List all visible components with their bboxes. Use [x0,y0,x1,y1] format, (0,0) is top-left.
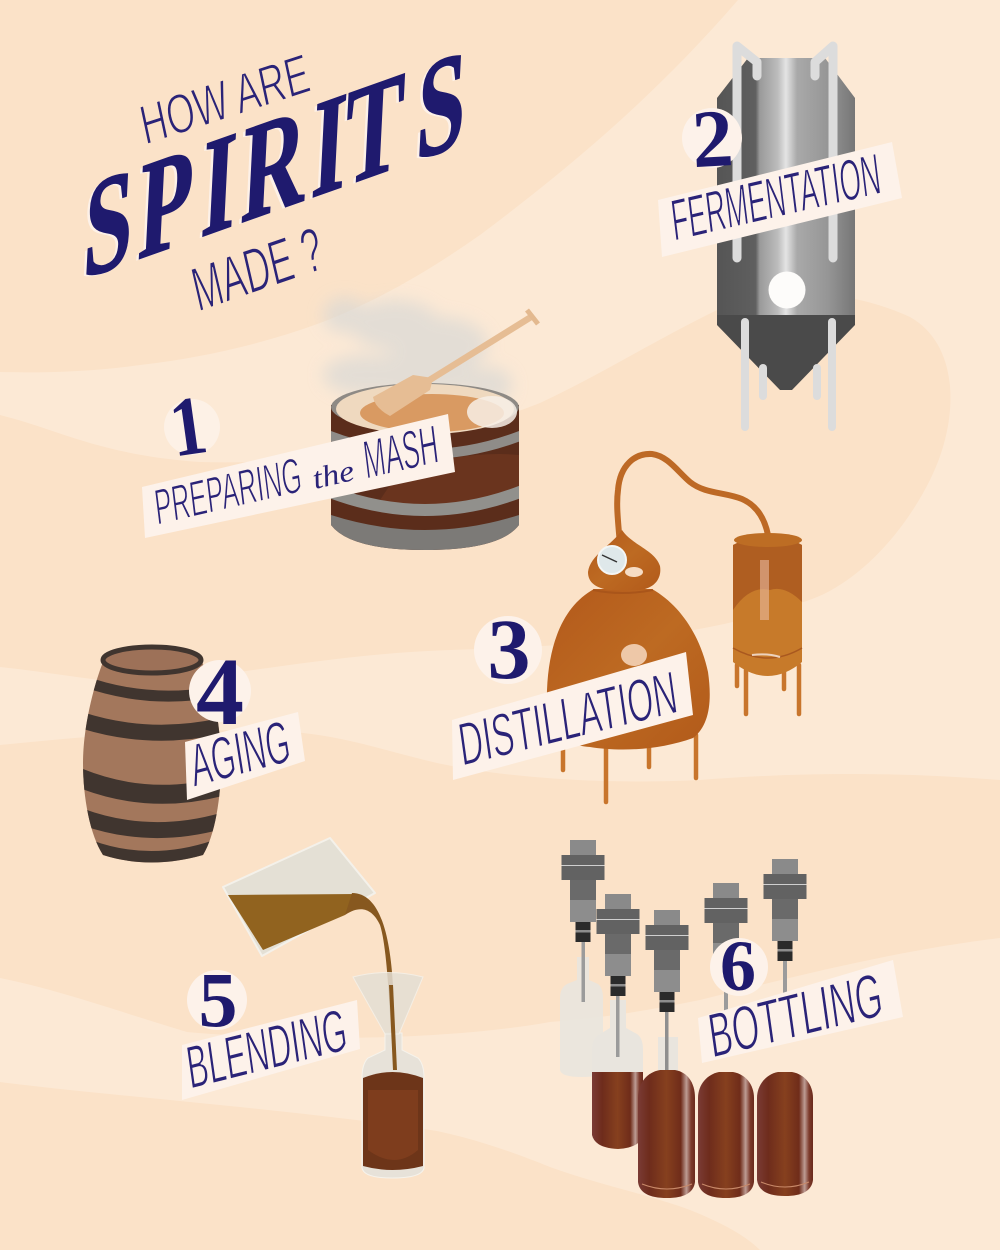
step 1: label preparing the mash: the [309,454,357,496]
plunger a [562,840,604,1002]
legs [745,322,832,427]
bottle [362,1033,424,1178]
swan neck pipe [617,454,768,545]
title line: made: MADE ? [186,214,329,326]
step 5: label blending: BLENDING [182,996,351,1102]
steam cloud [323,297,512,403]
pot body [331,405,519,550]
beaker glass [223,838,375,956]
step 5: number: 5 [198,956,238,1043]
step 4: wooden barrel [83,644,220,862]
step 1: label preparing the mash: PREPARING [152,446,304,536]
still legs [563,665,799,802]
upper rods [737,46,833,258]
still dome [588,530,660,590]
pouring stream [345,893,397,1070]
bottle d [698,1072,754,1198]
funnel [353,972,423,1034]
step 3: label distillation [452,652,693,780]
step 6: number [710,926,768,1006]
title line: spirits shadow: SPIRITS [77,20,467,312]
step 6: bottling line [560,840,813,1198]
beaker liquid [228,894,357,950]
step 4: label aging [185,707,305,800]
step 1: label preparing the mash: MASH [360,414,442,491]
step 3: copper still [547,454,802,802]
title line: how are: HOW ARE [135,42,315,157]
step 6: label bottling [698,960,903,1072]
step 6: number: 6 [720,926,756,1006]
barrel hoops [75,680,230,857]
step 2: label fermentation [658,141,902,257]
ghost bottle a [560,957,603,1077]
bottle liquid [363,1072,423,1170]
step 1: mash pot illustration [323,297,538,550]
title line: spirits: SPIRITS [80,18,470,310]
step 5: number [187,956,247,1043]
wooden paddle [373,310,538,416]
step 3: number: 3 [488,601,530,697]
step 2: number: 2 [690,92,735,185]
condenser tank [733,535,802,676]
plunger b [596,894,640,1057]
barrel staves [83,662,221,862]
tank body [717,58,855,316]
step 3: label distillation: DISTILLATION [454,658,681,779]
step 5: label blending [182,996,360,1102]
plunger e [764,859,806,1011]
step 2: fermentation tank [717,46,855,427]
bottle c [638,1037,695,1198]
still body [547,589,710,750]
plunger d [704,883,748,1025]
step 4: number: 4 [196,638,244,745]
porthole [768,272,806,308]
step 4: label aging: AGING [186,707,295,800]
pot rim and mash surface [331,383,519,431]
step 1: number: 1 [164,378,212,475]
bottle e [757,1072,813,1196]
step 5: pouring beaker and bottle [223,838,424,1178]
pressure gauge [598,546,626,574]
plunger c [646,910,688,1070]
bottle b [592,1000,643,1149]
tank cone [717,315,855,390]
step 3: number [474,601,542,697]
title [77,18,470,326]
